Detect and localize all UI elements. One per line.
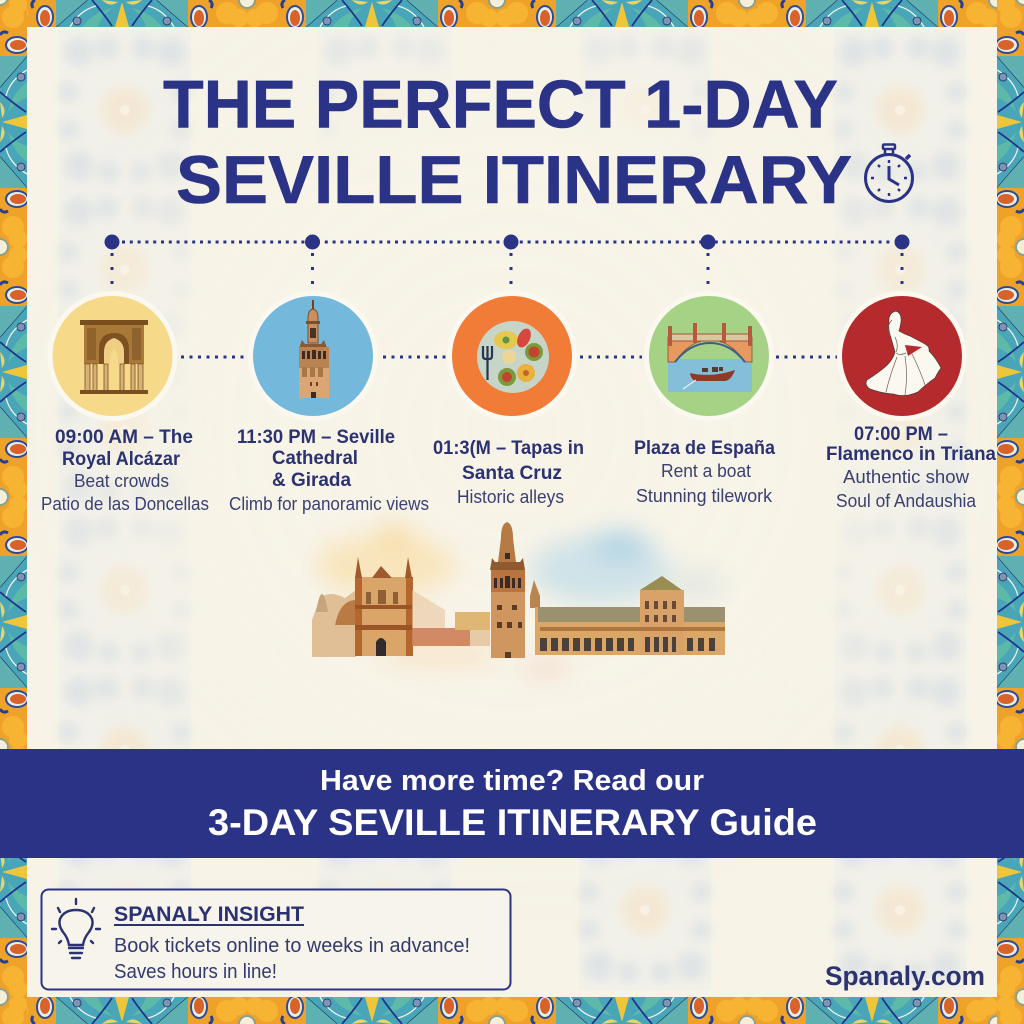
text: stop 3: 01:3(M – Tapas in	[433, 437, 584, 459]
icon: tapas plate	[447, 291, 577, 421]
stop 4: Plaza de Espana	[634, 291, 775, 506]
stop 1: Royal Alcazar	[41, 291, 209, 514]
text: stop 4: Rent a boat	[661, 461, 751, 481]
text: stop 5: Soul of Andaushia	[836, 491, 977, 511]
icon: bridge and boat	[644, 291, 774, 421]
callout: Spanaly insight	[42, 890, 510, 990]
text: stop 5: Authentic show	[843, 467, 970, 487]
callout: Spanaly insight: Book tickets online to weeks in advance!	[114, 935, 470, 957]
text: stop 1: 09:00 AM – The	[55, 426, 193, 448]
icon: Alcazar arch	[48, 291, 178, 421]
plaza de espana building	[535, 576, 725, 655]
icon: flamenco dancer	[837, 291, 967, 421]
stop 5: Flamenco	[826, 291, 996, 511]
stop 2: Seville Cathedral	[229, 291, 429, 514]
text: stop 4: Stunning tilework	[636, 486, 773, 506]
text: stop 5: 07:00 PM –	[854, 423, 948, 445]
icon: light bulb	[52, 899, 100, 958]
text: stop 2	[229, 426, 429, 514]
text: stop 3	[433, 437, 584, 507]
icon: stopwatch	[866, 144, 912, 202]
text: stop 4	[634, 437, 775, 506]
title	[163, 66, 852, 218]
icon: Giralda tower	[248, 291, 378, 421]
text: stop 2: Cathedral	[272, 447, 358, 469]
call-to-action band	[0, 749, 1024, 858]
call-to-action band: Have more time? Read our	[320, 765, 704, 797]
text: stop 3: Santa Cruz	[462, 462, 562, 484]
text: stop 2: & Girada	[272, 469, 351, 491]
watercolor washes	[315, 525, 725, 676]
timeline: stop markers	[104, 234, 910, 250]
title: THE PERFECT 1-DAY	[163, 66, 838, 142]
stop 3: Tapas	[433, 291, 584, 507]
callout: Spanaly insight: SPANALY INSIGHT	[114, 903, 304, 926]
call-to-action band: 3-DAY SEVILLE ITINERARY Guide	[208, 802, 817, 843]
cathedral	[312, 557, 490, 657]
text: stop 5	[826, 423, 996, 511]
text: stop 1: Royal Alcázar	[62, 448, 180, 470]
callout: Spanaly insight: Saves hours in line!	[114, 961, 277, 983]
text: stop 1: Beat crowds	[74, 471, 169, 491]
title: SEVILLE ITINERARY	[176, 142, 852, 218]
giralda tower	[490, 515, 540, 658]
text: stop 5: Flamenco in Triana	[826, 443, 996, 465]
text: stop 3: Historic alleys	[457, 487, 564, 507]
text: stop 4: Plaza de España	[634, 437, 775, 459]
brand: Spanaly.com: Spanaly.com	[825, 961, 985, 991]
illustration: Seville watercolor skyline	[312, 515, 725, 676]
text: stop 1: Patio de las Doncellas	[41, 494, 209, 514]
timeline: connector dots	[112, 242, 902, 357]
text: stop 1	[41, 426, 209, 514]
text: stop 2: Climb for panoramic views	[229, 494, 429, 514]
text: stop 2: 11:30 PM – Seville	[237, 426, 395, 448]
